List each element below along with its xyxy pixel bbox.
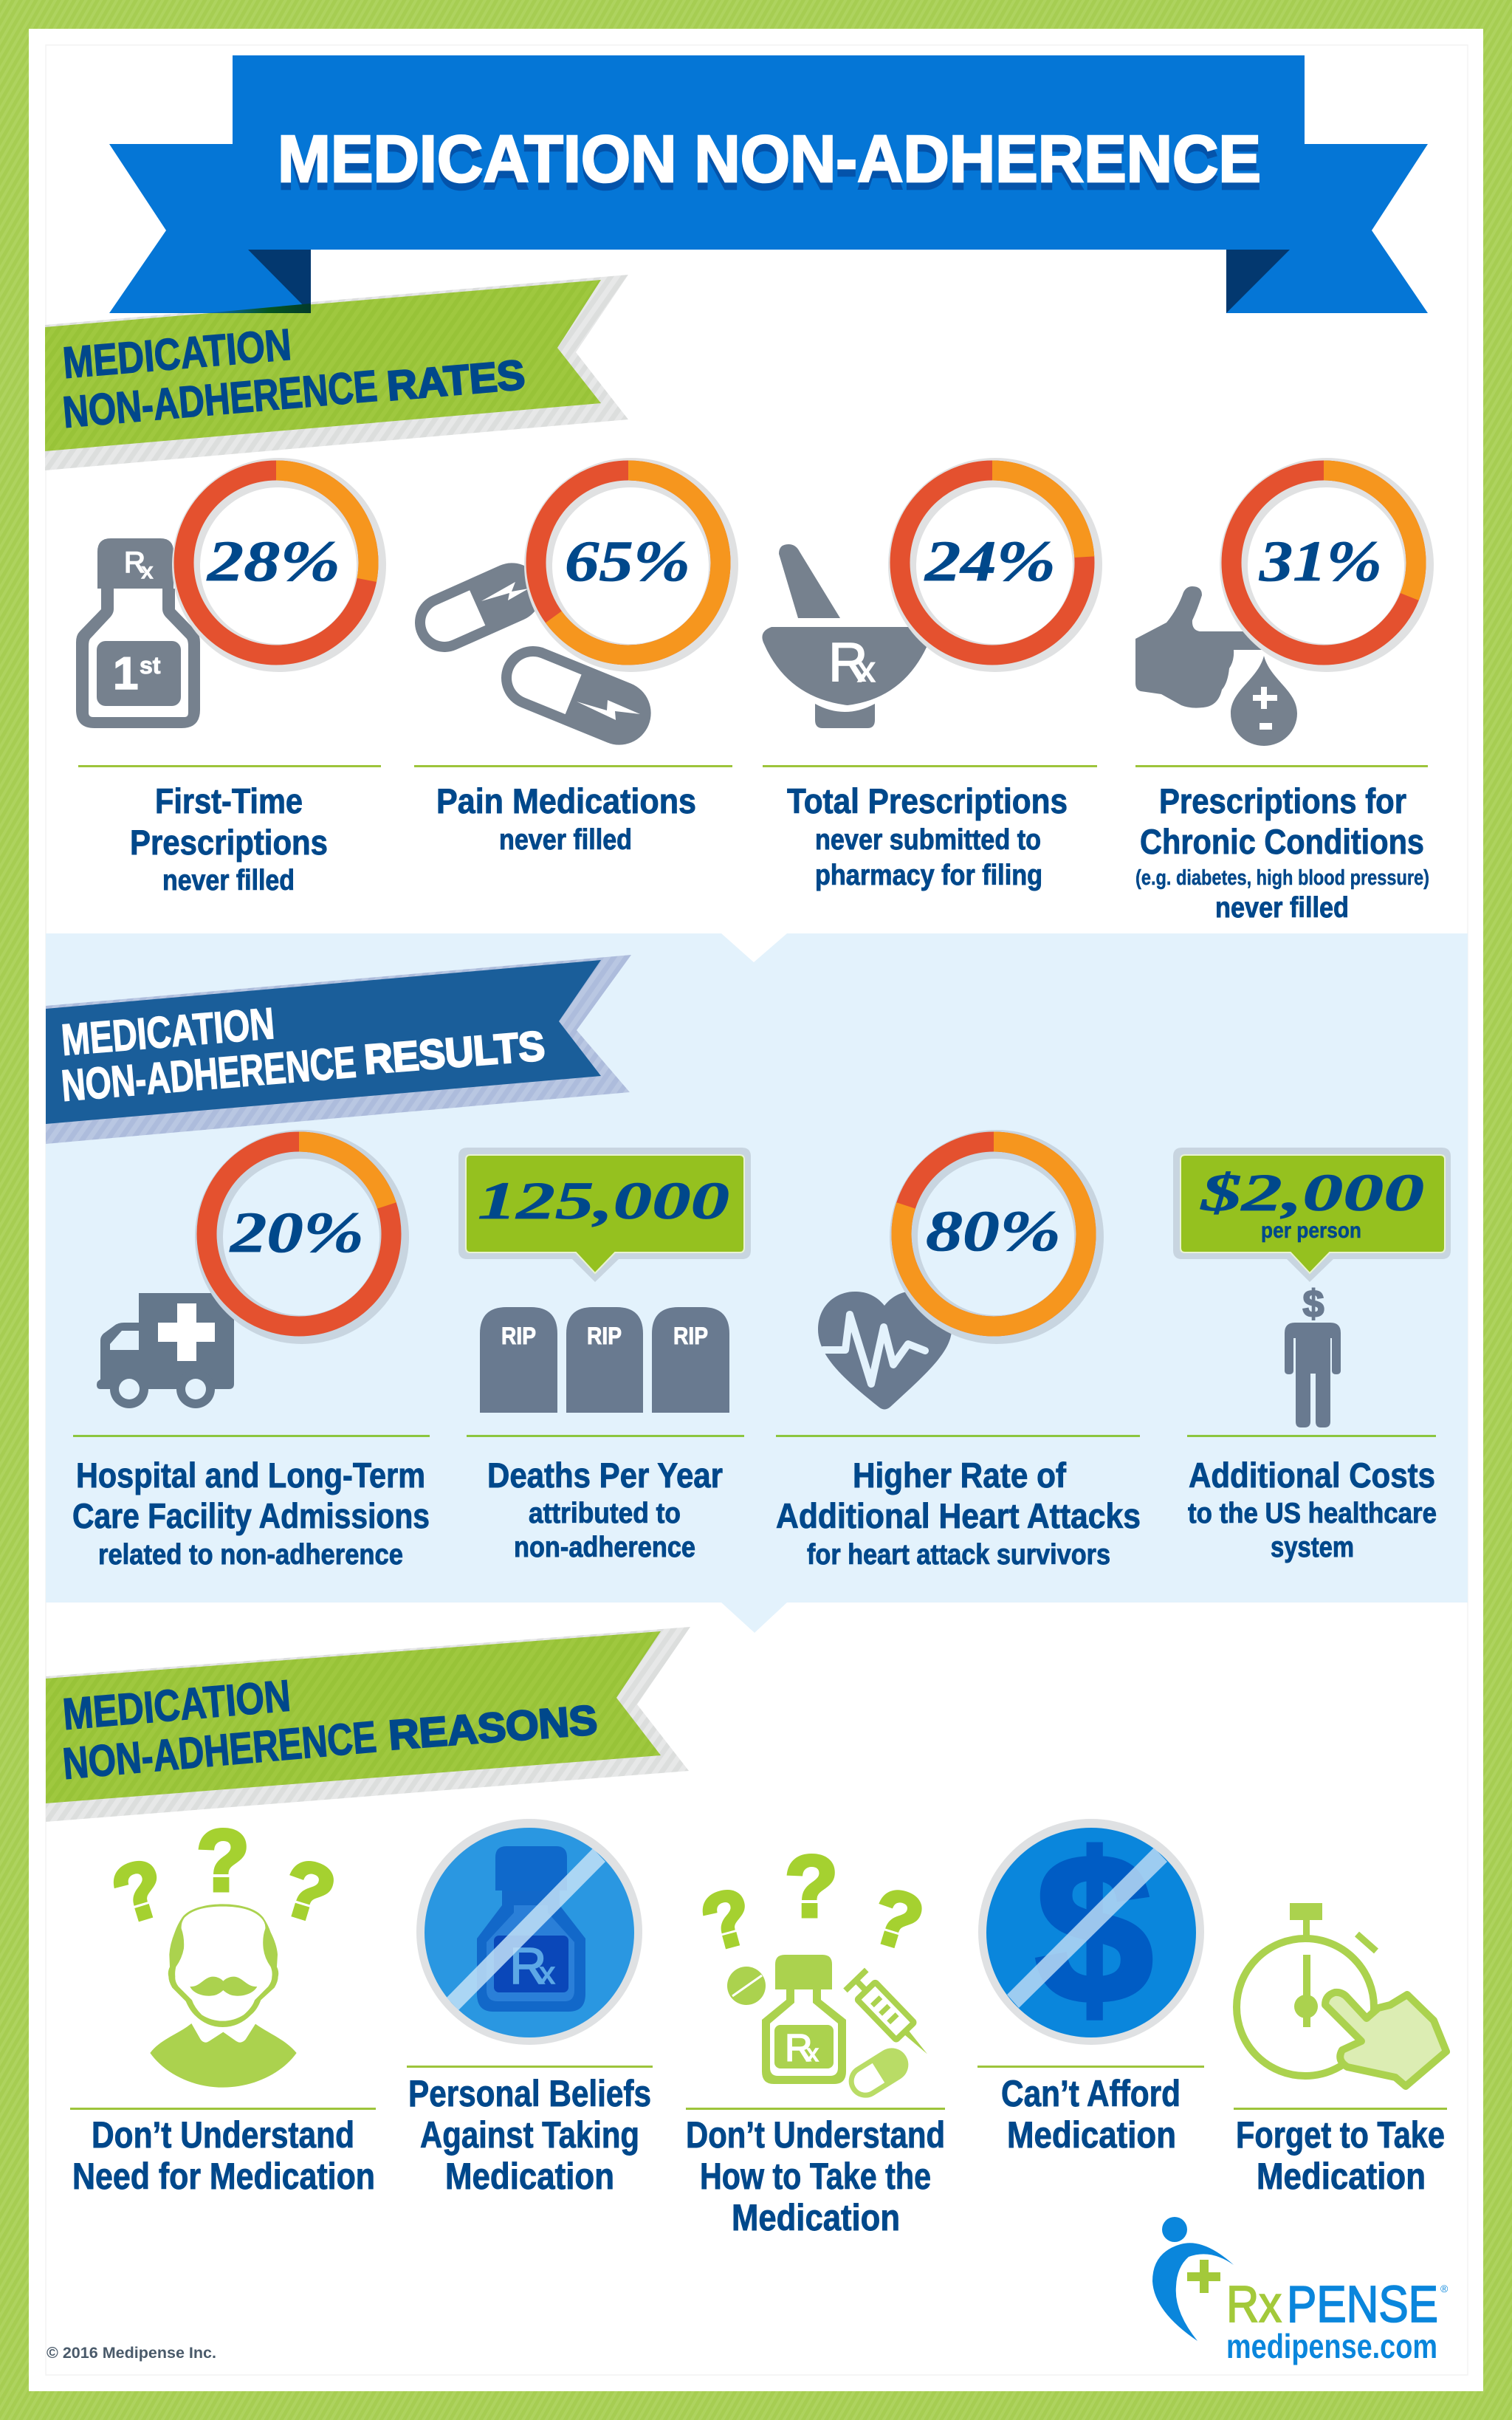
label: don't understand need: Don’t Understand — [92, 2114, 354, 2156]
label: personal beliefs: Medication — [445, 2156, 614, 2197]
label: hospital admissions: related to non-adherence — [98, 1539, 403, 1571]
icon: confused man: ? — [272, 1841, 345, 1941]
label: first-time prescriptions: never filled — [162, 865, 295, 897]
copyright: © 2016 Medipense Inc. — [47, 2345, 216, 2362]
callout: $2,000 per person — [1173, 1148, 1451, 1282]
label: deaths per year: non-adherence — [514, 1532, 695, 1563]
icon: no dollar — [978, 1810, 1204, 2047]
section ribbon: results — [46, 955, 631, 1144]
callout: $2,000 per person: $2,000 — [1200, 1163, 1424, 1222]
label: total prescriptions: Total Prescriptions — [787, 781, 1068, 820]
logo: RxPense — [1152, 2217, 1449, 2365]
label: don't understand need: Need for Medication — [72, 2156, 375, 2197]
label: pain medications: Pain Medications — [436, 781, 696, 820]
callout: 125,000 — [458, 1148, 751, 1282]
icon: confused man: ? — [196, 1812, 250, 1910]
logo: RxPense: Rx — [1226, 2275, 1282, 2333]
title: MEDICATION NON-ADHERENCE — [278, 123, 1261, 196]
donut: 24%: 24% — [924, 529, 1056, 593]
label: first-time prescriptions: First-Time — [155, 781, 303, 820]
label: don't understand how — [686, 2114, 945, 2238]
label: prescriptions for chronic conditions: (e.g. diabetes, high blood pressure) — [1135, 866, 1429, 890]
icon: three gravestones — [480, 1307, 729, 1413]
label: hospital admissions: Hospital and Long-Term — [76, 1456, 425, 1495]
donut: 28% — [172, 458, 386, 672]
label: deaths per year: attributed to — [529, 1498, 681, 1529]
logo: RxPense: PENSE — [1287, 2275, 1438, 2333]
label: don't understand how: How to Take the — [700, 2156, 931, 2197]
icon: prescription bottle first: R — [124, 546, 145, 579]
label: deaths per year: Deaths Per Year — [487, 1456, 723, 1495]
section ribbon: rates — [45, 275, 628, 470]
icon: three gravestones: RIP — [501, 1323, 536, 1349]
section ribbon: reasons — [46, 1627, 690, 1822]
icon: bottle syringe and pills with question marks: ? — [785, 1838, 838, 1936]
icon: mortar and pestle: x — [857, 651, 875, 690]
logo: RxPense: ® — [1440, 2283, 1449, 2294]
label: hospital admissions — [72, 1456, 430, 1571]
label: prescriptions for chronic conditions: never filled — [1215, 892, 1349, 924]
donut: 80%: 80% — [926, 1199, 1061, 1263]
icon: prescription bottle first — [76, 538, 200, 728]
label: personal beliefs: Against Taking — [420, 2114, 639, 2156]
label: heart attacks: Additional Heart Attacks — [776, 1496, 1141, 1535]
section ribbon: reasons: MEDICATION — [61, 1670, 292, 1739]
label: deaths per year — [487, 1456, 723, 1563]
label: additional costs: system — [1271, 1532, 1354, 1563]
label: can't afford — [1001, 2073, 1181, 2156]
donut: 20% — [195, 1130, 409, 1344]
label: prescriptions for chronic conditions: Chronic Conditions — [1140, 822, 1424, 861]
section ribbon: results: NON-ADHERENCE — [60, 1037, 358, 1111]
label: total prescriptions: never submitted to — [815, 824, 1041, 856]
icon: no personal beliefs bottle — [416, 1819, 642, 2045]
label: prescriptions for chronic conditions: Prescriptions for — [1159, 781, 1406, 820]
icon: three gravestones: RIP — [673, 1323, 708, 1349]
icon: mortar and pestle — [762, 544, 932, 728]
label: total prescriptions: pharmacy for filing — [815, 860, 1042, 891]
icon: bottle syringe and pills with question marks — [693, 1838, 938, 2100]
donut: 80% — [890, 1130, 1104, 1344]
section ribbon: rates: RATES — [385, 351, 526, 409]
label: heart attacks: for heart attack survivors — [807, 1539, 1110, 1571]
label: personal beliefs — [408, 2073, 651, 2197]
label: forget to take — [1236, 2114, 1445, 2197]
icon: person with dollar head: $ — [1303, 1283, 1324, 1326]
donut: 31%: 31% — [1259, 529, 1382, 593]
callout: 125,000: 125,000 — [478, 1171, 729, 1230]
label: forget to take: Medication — [1257, 2156, 1426, 2197]
label: additional costs: Additional Costs — [1189, 1456, 1435, 1495]
label: first-time prescriptions — [130, 781, 328, 897]
icon: stopwatch with pointing hand — [1237, 1903, 1446, 2086]
label: total prescriptions — [787, 781, 1068, 891]
icon: prescription bottle first: x — [142, 559, 153, 583]
section ribbon: rates: MEDICATION — [61, 320, 293, 388]
title: MEDICATION NON-ADHERENCE — [278, 130, 1261, 204]
label: pain medications: never filled — [499, 824, 632, 856]
label: don't understand how: Medication — [732, 2197, 900, 2238]
icon: finger prick with blood drop — [1135, 586, 1297, 746]
icon: heart with pulse — [818, 1292, 952, 1409]
label: heart attacks — [776, 1456, 1141, 1571]
label: additional costs — [1188, 1456, 1437, 1563]
title banner — [109, 55, 1428, 313]
icon: three gravestones: RIP — [587, 1323, 622, 1349]
panel: results background — [46, 933, 1468, 1633]
icon: confused man: ? — [103, 1841, 175, 1941]
icon: confused man — [103, 1812, 345, 2088]
icon: person with dollar head — [1285, 1283, 1341, 1427]
logo: RxPense: medipense.com — [1226, 2327, 1437, 2365]
donut: 65% — [524, 458, 738, 672]
section ribbon: reasons: REASONS — [387, 1696, 599, 1758]
label: heart attacks: Higher Rate of — [853, 1456, 1066, 1495]
donut: 20%: 20% — [230, 1200, 364, 1264]
icon: bottle syringe and pills with question marks: Rx — [785, 2027, 819, 2070]
donut: 24% — [888, 458, 1102, 672]
icon: no dollar: $ — [1035, 1810, 1153, 2047]
label: hospital admissions: Care Facility Admissions — [72, 1496, 430, 1535]
section ribbon: results: RESULTS — [362, 1022, 546, 1083]
callout: $2,000 per person: per person — [1261, 1218, 1361, 1243]
label: first-time prescriptions: Prescriptions — [130, 823, 328, 862]
icon: no personal beliefs bottle: Rx — [509, 1937, 555, 1995]
icon: bottle syringe and pills with question marks: ? — [693, 1872, 761, 1967]
icon: prescription bottle first: 1 — [113, 648, 138, 699]
donut: 31% — [1220, 458, 1434, 672]
donut: 65%: 65% — [565, 529, 690, 593]
label: forget to take: Forget to Take — [1236, 2114, 1445, 2156]
label: personal beliefs: Personal Beliefs — [408, 2073, 651, 2114]
donut: 28%: 28% — [207, 529, 340, 593]
section ribbon: reasons: NON-ADHERENCE — [61, 1712, 379, 1789]
label: don't understand how: Don’t Understand — [686, 2114, 945, 2156]
icon: prescription bottle first: st — [140, 652, 161, 679]
icon: pills — [405, 554, 661, 755]
icon: mortar and pestle: R — [828, 631, 867, 693]
icon: ambulance — [97, 1293, 234, 1408]
icon: bottle syringe and pills with question marks: ? — [862, 1871, 932, 1968]
label: can't afford: Medication — [1007, 2114, 1176, 2156]
section ribbon: rates: NON-ADHERENCE — [61, 361, 379, 437]
label: pain medications — [436, 781, 696, 856]
label: don't understand need — [72, 2114, 375, 2197]
label: can't afford: Can’t Afford — [1001, 2073, 1181, 2114]
section ribbon: results: MEDICATION — [60, 998, 276, 1065]
label: additional costs: to the US healthcare — [1188, 1498, 1437, 1529]
label: prescriptions for chronic conditions — [1135, 781, 1429, 924]
